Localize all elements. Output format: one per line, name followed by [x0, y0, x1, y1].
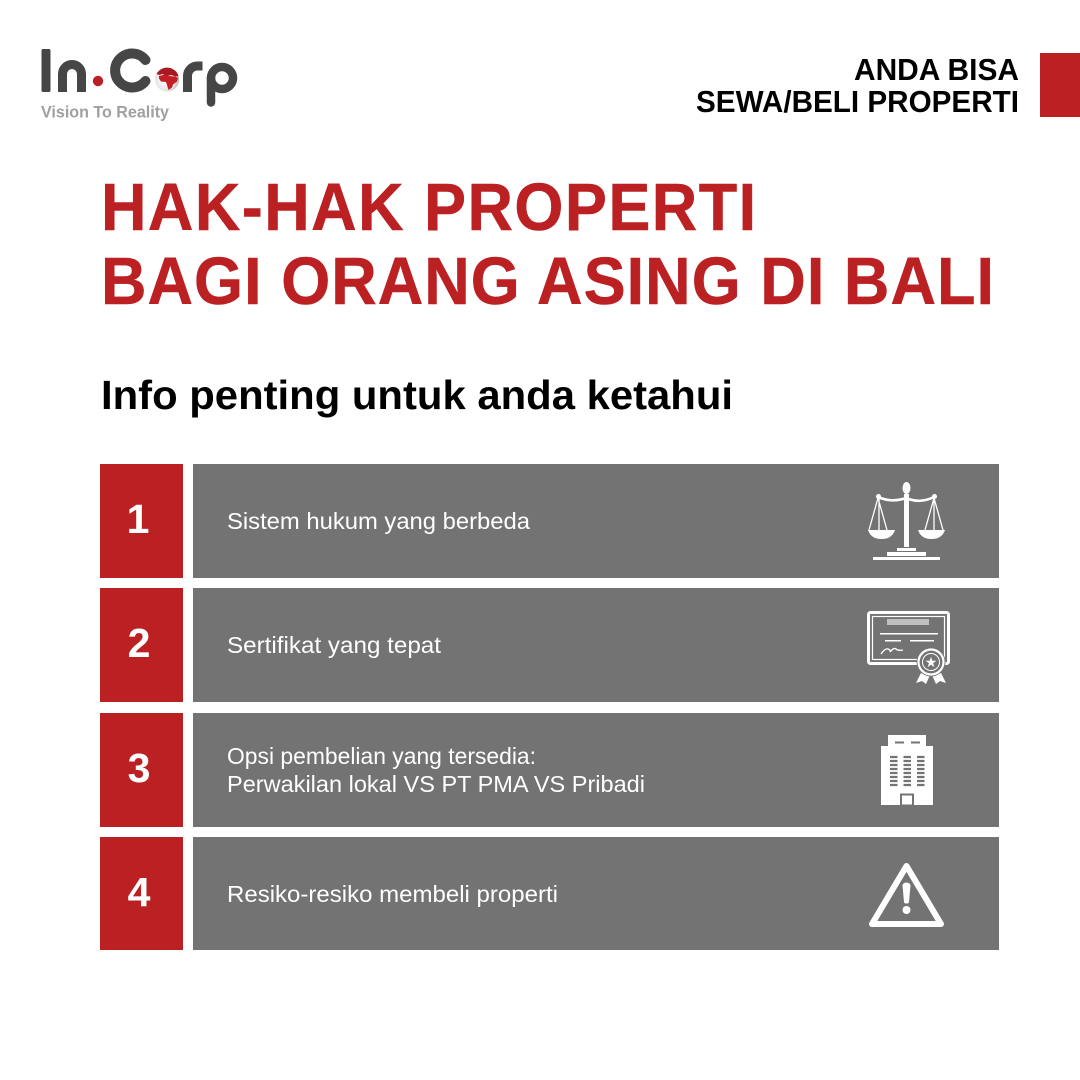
panel: row 1 text: [193, 464, 999, 578]
number 3: [100, 713, 183, 827]
panel: row 3 text: [193, 713, 999, 827]
number 2: [100, 588, 183, 702]
header tagline: SEWA/BELI PROPERTI: [696, 85, 1019, 119]
row 1: [100, 464, 999, 578]
row 2: [100, 588, 999, 702]
row 4: [100, 837, 999, 950]
logo: InCorp: [41, 49, 233, 122]
icon: certificate: ★: [925, 654, 937, 670]
icon: scales of justice: [868, 482, 945, 560]
panel: row 1 text: Sistem hukum yang berbeda: [227, 508, 530, 534]
header tagline: [696, 53, 1019, 119]
title: HAK-HAK PROPERTI: [101, 169, 756, 244]
icon: office building: [881, 735, 933, 806]
number 1: 1: [127, 496, 149, 542]
panel: row 2 text: Sertifikat yang tepat: [227, 632, 442, 658]
number 3: 3: [128, 745, 150, 791]
row 3: [100, 713, 999, 827]
title: BAGI ORANG ASING DI BALI: [101, 243, 994, 318]
panel: row 3 text: Opsi pembelian yang tersedia:: [227, 743, 536, 769]
panel: row 4 text: [193, 837, 999, 950]
panel: row 2 text: [193, 588, 999, 702]
title: [101, 169, 994, 318]
number 4: 4: [128, 869, 151, 915]
icon: warning triangle: [872, 866, 941, 924]
panel: row 3 text: Perwakilan lokal VS PT PMA VS Pribadi: [227, 771, 645, 797]
header red block: [1040, 53, 1080, 117]
icon: certificate: [868, 612, 948, 684]
subtitle: Info penting untuk anda ketahui: [101, 372, 733, 418]
panel: row 4 text: Resiko-resiko membeli properti: [227, 881, 558, 907]
header tagline: ANDA BISA: [854, 53, 1019, 87]
number 2: 2: [128, 620, 150, 666]
logo: InCorp: Vision To Reality: [41, 102, 170, 122]
number 4: [100, 837, 183, 950]
number 1: [100, 464, 183, 578]
